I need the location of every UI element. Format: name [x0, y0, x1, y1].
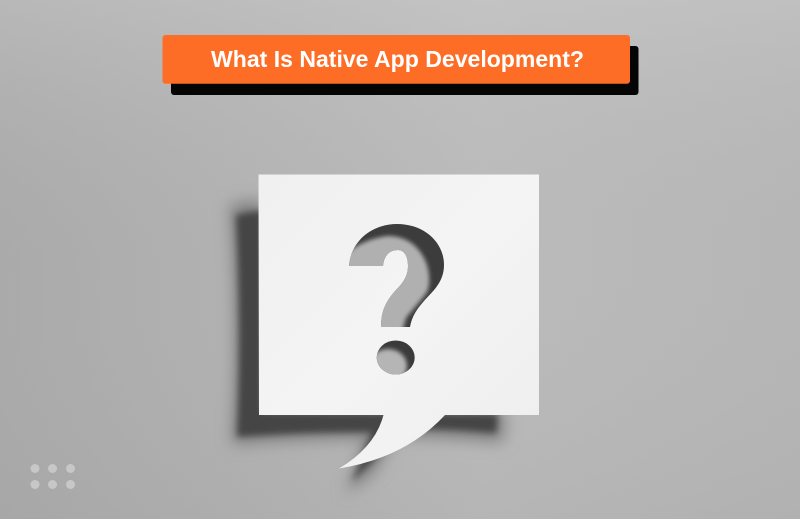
speech bubble drop shadow: [230, 200, 505, 494]
icon: six dot grid: [30, 464, 75, 489]
speech bubble paper card with tail: [258, 174, 539, 468]
question mark cut-out dot: [376, 340, 415, 374]
title banner shadow: [171, 46, 638, 95]
question mark cut-out stem: [349, 224, 444, 327]
title banner: [162, 35, 630, 84]
title text: What Is Native App Development?: [211, 46, 584, 72]
